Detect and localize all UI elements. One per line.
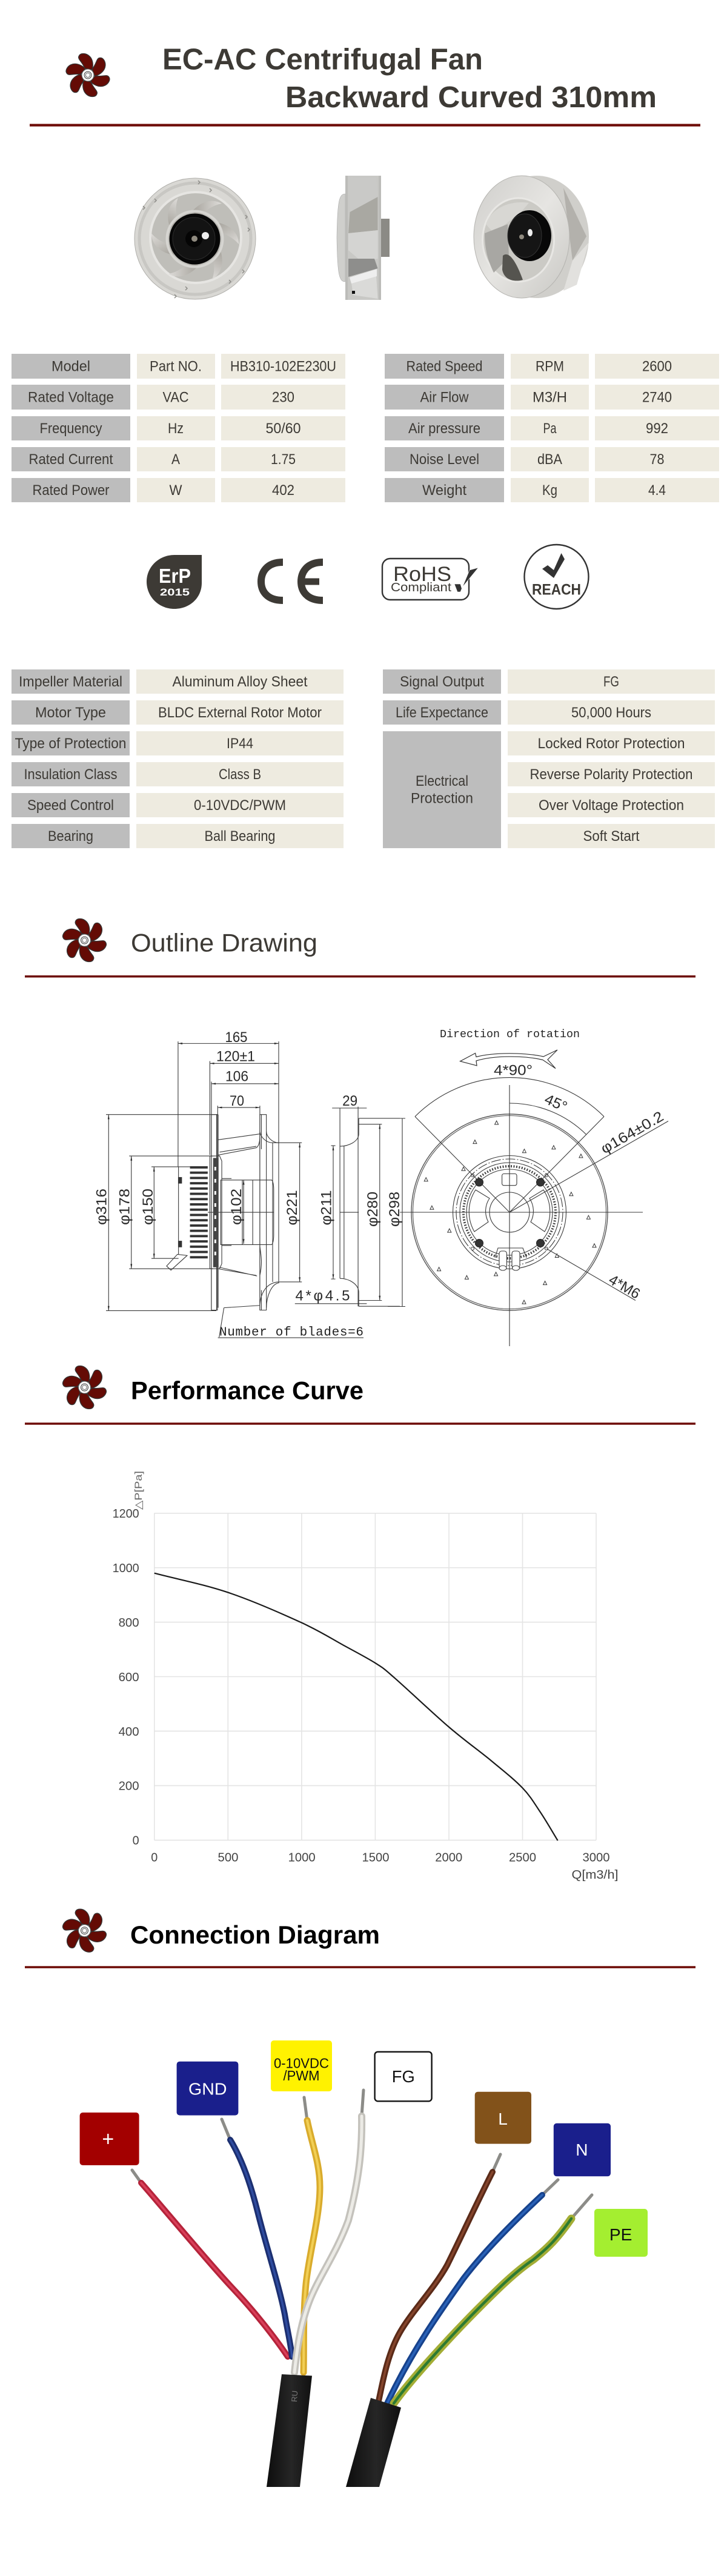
y axis labels: 800 xyxy=(119,1616,139,1630)
axis unit labels xyxy=(133,1471,618,1882)
dimension labels: φ280 xyxy=(365,1192,381,1227)
row: Rated Speed: 2600 xyxy=(642,359,672,374)
label: GND: GND xyxy=(188,2079,227,2099)
heading: Connection Diagram: Connection Diagram xyxy=(130,1920,380,1949)
header logo xyxy=(65,53,111,97)
icon: ErP 2015: ErP xyxy=(159,565,191,587)
wire: red xyxy=(141,2183,288,2357)
dimension labels: φ102 xyxy=(228,1189,245,1225)
y axis labels: 600 xyxy=(119,1671,139,1684)
label: 0-10VDC/PWM: /PWM xyxy=(284,2068,320,2083)
connection diagram xyxy=(80,2040,648,2487)
row: Rated Current: 1.75 xyxy=(271,451,296,468)
cable sheath xyxy=(267,2374,312,2487)
wire: blue xyxy=(230,2140,292,2357)
row: Signal Output xyxy=(383,669,715,694)
row: Bearing: Bearing xyxy=(48,828,93,845)
outline drawing: side view xyxy=(94,1029,403,1340)
row: Air pressure: Pa xyxy=(543,420,557,437)
row: Model: HB310-102E230U xyxy=(230,359,336,374)
section logo: outline drawing xyxy=(61,918,108,962)
section logo: connection diagram xyxy=(61,1909,108,1952)
outline drawing: front view xyxy=(388,1029,668,1346)
dimension labels: φ316 xyxy=(94,1189,110,1225)
row: Air pressure: 992 xyxy=(646,420,668,437)
x axis labels: 500 xyxy=(218,1851,239,1865)
label: N: N xyxy=(576,2140,588,2159)
label: FG xyxy=(375,2052,432,2101)
bare conductor tips xyxy=(493,2154,592,2219)
label: PE xyxy=(594,2209,648,2257)
row: Rated Power: W xyxy=(170,482,182,499)
wire: green-yellow xyxy=(394,2219,571,2403)
fan front view xyxy=(134,178,256,299)
value: Over Voltage Protection xyxy=(508,793,715,817)
section logo: performance curve xyxy=(61,1366,108,1409)
row: Type of Protection xyxy=(12,731,344,755)
dimension labels: 106 xyxy=(225,1068,248,1084)
row: Motor Type xyxy=(12,700,344,725)
dimension labels: 4*φ4.5 xyxy=(296,1288,350,1304)
front view dimension labels: φ164±0.2 xyxy=(598,1108,666,1157)
cell: Electrical Protection: Protection xyxy=(411,790,473,807)
front view dimension labels: 4*90° xyxy=(494,1063,533,1079)
dimension labels: 165 xyxy=(225,1029,247,1046)
title xyxy=(162,43,657,114)
dimension labels: φ298 xyxy=(387,1192,403,1227)
row: Frequency: 50/60 xyxy=(265,420,300,437)
dimension labels: φ150 xyxy=(140,1189,156,1225)
row: Frequency: Hz xyxy=(168,420,184,437)
front view dimension labels: 4*M6 xyxy=(606,1272,643,1303)
y axis labels: 0 xyxy=(133,1834,139,1848)
value: Reverse Polarity Protection: Reverse Polarity Protection xyxy=(529,766,693,783)
row: Rated Voltage: VAC xyxy=(162,389,189,406)
row: Rated Power: Rated Power xyxy=(33,482,109,499)
five-core cable xyxy=(132,2090,364,2487)
dimension labels: 29 xyxy=(342,1093,357,1109)
icon: RoHS Compliant: Compliant xyxy=(391,581,451,594)
fan front linework xyxy=(388,1078,668,1346)
x axis labels: 3000 xyxy=(583,1851,609,1865)
label: + xyxy=(80,2113,139,2165)
row: Life Expectance: 50,000 Hours xyxy=(571,705,651,721)
row: Motor Type: Motor Type xyxy=(35,705,106,721)
x axis labels: 0 xyxy=(151,1851,158,1865)
label: L xyxy=(475,2092,531,2144)
title: EC-AC Centrifugal Fan xyxy=(162,43,483,76)
x axis labels: 1500 xyxy=(362,1851,389,1865)
label: FG: FG xyxy=(392,2067,415,2086)
row: Type of Protection: Type of Protection xyxy=(15,735,126,752)
specification table 1 right xyxy=(385,354,719,502)
y axis labels: 200 xyxy=(119,1780,139,1793)
icon: RoHS Compliant: RoHS xyxy=(393,563,451,586)
value: Soft Start xyxy=(508,824,715,848)
icon: CE mark xyxy=(261,562,323,600)
front view dimension labels: 45° xyxy=(542,1091,569,1115)
row: Weight xyxy=(385,478,719,502)
row: Air pressure xyxy=(385,416,719,440)
x axis labels: 1000 xyxy=(288,1851,316,1865)
arrow: direction of rotation xyxy=(460,1050,557,1069)
row: Rated Speed: RPM xyxy=(536,359,564,374)
row: Model xyxy=(12,354,345,379)
three-core cable xyxy=(346,2154,592,2487)
y axis labels xyxy=(113,1507,139,1848)
label: L: L xyxy=(498,2110,508,2128)
icon: ErP 2015 xyxy=(147,555,202,609)
row: Impeller Material: Aluminum Alloy Sheet xyxy=(172,674,308,690)
row: Rated Voltage xyxy=(12,385,345,410)
row: Frequency: Frequency xyxy=(40,420,102,437)
value: Locked Rotor Protection: Locked Rotor Protection xyxy=(538,735,685,752)
specification table 2 left xyxy=(12,669,344,848)
row: Signal Output: Signal Output xyxy=(400,674,484,690)
dimension labels: φ221 xyxy=(284,1190,300,1225)
cell: Electrical Protection: Electrical xyxy=(416,773,468,789)
row: Bearing xyxy=(12,824,344,848)
row: Air Flow: M3/H xyxy=(533,389,567,406)
row: Type of Protection: IP44 xyxy=(227,735,253,752)
row: Weight: Kg xyxy=(542,482,557,499)
row: Weight: Weight xyxy=(422,482,466,499)
row: Bearing: Ball Bearing xyxy=(205,828,275,845)
certification icons xyxy=(147,545,589,609)
row: Insulation Class: Insulation Class xyxy=(24,766,118,783)
value: Reverse Polarity Protection xyxy=(508,762,715,786)
row: Noise Level: 78 xyxy=(649,451,664,468)
chart: performance curve xyxy=(113,1471,619,1882)
value: Locked Rotor Protection xyxy=(508,731,715,755)
y axis labels: 400 xyxy=(119,1725,139,1739)
row: Noise Level: dBA xyxy=(537,451,562,468)
row: Insulation Class xyxy=(12,762,344,786)
label: +: + xyxy=(102,2128,114,2151)
row: Speed Control: Speed Control xyxy=(27,797,114,814)
row: Air Flow: Air Flow xyxy=(420,389,469,406)
wire: white xyxy=(294,2116,362,2372)
title: Backward Curved 310mm xyxy=(285,81,657,114)
label: 0-10VDC/PWM: 0-10VDC xyxy=(274,2055,329,2071)
x axis labels: 2500 xyxy=(509,1851,536,1865)
axis unit labels: Q[m3/h] xyxy=(572,1868,618,1882)
specification table 1 left xyxy=(12,354,345,502)
x axis labels: 2000 xyxy=(435,1851,462,1865)
row: Impeller Material: Impeller Material xyxy=(19,674,122,690)
heading: Outline Drawing: Outline Drawing xyxy=(131,929,317,957)
row: Noise Level xyxy=(385,447,719,471)
value: Over Voltage Protection: Over Voltage Protection xyxy=(539,797,684,814)
direction of rotation label: Direction of rotation xyxy=(440,1029,580,1041)
dimension labels: φ211 xyxy=(318,1190,334,1226)
icon: REACH xyxy=(525,545,589,609)
fan angled view xyxy=(474,176,589,298)
row: Noise Level: Noise Level xyxy=(410,451,479,468)
row: Life Expectance: Life Expectance xyxy=(396,705,488,721)
row: Motor Type: BLDC External Rotor Motor xyxy=(158,705,322,721)
row: Rated Speed: Rated Speed xyxy=(406,359,482,374)
row: Speed Control: 0-10VDC/PWM xyxy=(194,797,286,814)
mounting bolts xyxy=(475,1178,544,1247)
dimension labels xyxy=(94,1029,403,1340)
dimension labels: Number of blades=6 xyxy=(219,1326,364,1340)
x axis labels xyxy=(151,1851,609,1865)
wire: brown xyxy=(379,2172,493,2401)
row: Life Expectance xyxy=(383,700,715,725)
label: PE: PE xyxy=(609,2225,632,2244)
fan side view xyxy=(337,176,390,300)
label: N xyxy=(554,2123,611,2176)
row: Signal Output: FG xyxy=(603,674,619,690)
row: Rated Voltage: 230 xyxy=(272,389,294,406)
row: Rated Current: Rated Current xyxy=(29,451,113,468)
curve xyxy=(154,1573,558,1841)
cable sheath: RU xyxy=(290,2390,299,2402)
front view dimension labels xyxy=(494,1063,666,1303)
icon: ErP 2015: 2015 xyxy=(160,586,190,598)
row: Rated Voltage: Rated Voltage xyxy=(28,389,114,406)
row: Air Flow xyxy=(385,385,719,410)
row: Rated Current xyxy=(12,447,345,471)
dimension labels: φ178 xyxy=(117,1189,133,1225)
y axis labels: 1000 xyxy=(113,1562,139,1575)
cell: Electrical Protection xyxy=(383,731,501,848)
row: Frequency xyxy=(12,416,345,440)
cable sheath xyxy=(346,2398,401,2487)
icon: RoHS Compliant xyxy=(382,559,479,600)
value: Soft Start: Soft Start xyxy=(583,828,640,845)
row: Rated Power: 402 xyxy=(272,482,294,499)
bare conductor tips xyxy=(132,2090,364,2183)
row: Speed Control xyxy=(12,793,344,817)
fan cross-section linework xyxy=(106,1041,400,1338)
grid lines xyxy=(154,1513,596,1840)
row: Model: Part NO. xyxy=(150,359,202,374)
dimension labels: 120±1 xyxy=(216,1048,255,1065)
row: Air Flow: 2740 xyxy=(642,389,672,406)
heading: Performance Curve: Performance Curve xyxy=(131,1376,364,1405)
row: Rated Speed xyxy=(385,354,719,379)
label: 0-10VDC/PWM xyxy=(271,2040,332,2091)
wire: blue xyxy=(387,2195,542,2403)
icon: REACH: REACH xyxy=(532,582,581,599)
label: GND xyxy=(177,2062,238,2116)
row: Model: Model xyxy=(51,359,90,374)
rivet triangles xyxy=(424,1121,596,1304)
product photos xyxy=(134,176,589,300)
axis unit labels: △P[Pa] xyxy=(133,1471,144,1510)
y axis labels: 1200 xyxy=(113,1507,139,1521)
wire: yellow xyxy=(304,2120,320,2372)
row: Air pressure: Air pressure xyxy=(408,420,480,437)
dimension labels: 70 xyxy=(230,1093,244,1109)
row: Weight: 4.4 xyxy=(648,482,666,499)
row: Insulation Class: Class B xyxy=(219,766,261,783)
specification table 2 right xyxy=(383,669,715,848)
row: Rated Current: A xyxy=(171,451,180,468)
row: Rated Power xyxy=(12,478,345,502)
row: Impeller Material xyxy=(12,669,344,694)
